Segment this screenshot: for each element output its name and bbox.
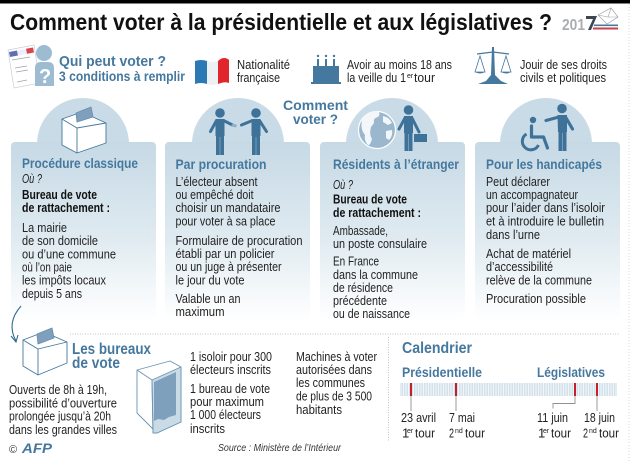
panel: par procuration (165, 98, 310, 320)
source: Source : Ministère de l’Intérieur (218, 443, 342, 454)
text block: Où ? (333, 177, 354, 192)
text: Avoir au moins 18 ans (347, 57, 452, 72)
date: 18 juin: 2 (583, 426, 588, 440)
text block: Procuration possible (486, 291, 586, 306)
icon: scales (475, 47, 511, 84)
condition: age: la veille du 1 (347, 70, 406, 85)
text block (333, 177, 427, 321)
text: isoloir: inscrits (190, 421, 225, 436)
text: horaires: prolongée jusqu’à 20h (9, 408, 111, 424)
section: les bureaux de vote (9, 328, 378, 437)
heading: législatives: Législatives (537, 364, 605, 380)
condition: age: er (407, 73, 414, 80)
section: calendrier (400, 340, 620, 440)
date: 23 avril: 23 avril (401, 410, 436, 425)
text block: choisir un mandataire (176, 200, 280, 215)
condition: age (311, 55, 452, 85)
icon: wheelchair and helper (522, 104, 572, 151)
text block: Bureau de vote (22, 187, 97, 202)
date: 11 juin: 11 juin (537, 410, 568, 425)
text block: de résidence (333, 280, 393, 295)
text: machines: de plus de 3 500 (296, 388, 372, 404)
timeline bar (400, 383, 617, 411)
date: 7 mai: 7 mai (449, 410, 475, 425)
section: qui peut voter (8, 45, 185, 88)
text: Nationalité (237, 57, 290, 72)
date: 11 juin (537, 410, 572, 440)
text block: précédente (333, 293, 387, 308)
text: isoloir: 1 000 électeurs (190, 407, 261, 422)
text block: où l’on paie (22, 260, 72, 274)
text: isoloir: électeurs inscrits (190, 362, 271, 377)
date: 7 mai: 2 (449, 426, 454, 440)
text block: dans la commune (333, 267, 418, 282)
date: 7 mai: tour (465, 426, 486, 440)
text: isoloir: pour maximum (190, 394, 264, 409)
text block: ou d’une commune (22, 246, 116, 262)
panel: pour les handicapés (475, 98, 620, 320)
text block: Achat de matériel (486, 246, 571, 261)
text: isoloir: 1 bureau de vote (190, 381, 270, 396)
title: Comment voter à la présidentielle et aux législatives ? (10, 9, 552, 35)
date: 11 juin: er (543, 428, 550, 435)
text block: La mairie (22, 220, 67, 235)
text block: un accompagnateur (486, 187, 579, 202)
date: 18 juin (583, 410, 620, 440)
text block: et à introduire le bulletin (486, 214, 604, 228)
text: horaires (9, 382, 117, 437)
condition: nationalité (195, 57, 290, 85)
text block: ou de naissance (333, 306, 410, 321)
icon: globe and traveller (358, 105, 427, 151)
text block: Valable un an (176, 291, 240, 306)
text: isoloir: 1 isoloir pour 300 (190, 349, 272, 364)
heading: Par procuration (176, 156, 266, 172)
heading: comment voter (283, 97, 348, 127)
date: 7 mai (449, 410, 486, 440)
text: machines (296, 349, 378, 417)
heading: Pour les handicapés (486, 156, 602, 172)
text block: Formulaire de procuration (176, 233, 302, 248)
text block: ou un juge à présenter (176, 259, 282, 274)
condition: age: tour (414, 70, 436, 85)
arrow (11, 306, 21, 342)
condition: nationalité: française (237, 70, 280, 85)
text block: L’électeur absent (176, 174, 258, 189)
text: horaires: Ouverts de 8h à 19h, (9, 382, 107, 397)
text block: ou empêché doit (176, 187, 254, 202)
icon: person with question mark (35, 45, 54, 88)
text block: relève de la commune (486, 272, 592, 288)
icon: cake (311, 55, 341, 84)
text block: d’accessibilité (486, 259, 553, 274)
text: isoloir (190, 349, 272, 436)
text block (176, 174, 302, 319)
text block: Bureau de vote (333, 192, 407, 206)
text block: pour l’aider dans l’isoloir (486, 200, 606, 215)
text block: En France (333, 254, 379, 268)
date: 7 mai: nd (455, 428, 463, 435)
date: 11 juin: tour (551, 426, 572, 440)
heading: Procédure classique (22, 155, 138, 171)
text: machines: autorisées dans (296, 362, 372, 377)
credit: AFP (9, 440, 53, 456)
credit: AFP: © (9, 444, 17, 456)
logo: 2017 (562, 8, 618, 34)
text block: dans l’urne (486, 227, 540, 242)
heading: comment voter: Comment (283, 97, 348, 113)
text block: le jour du vote (176, 272, 244, 288)
date: 23 avril: 1 (402, 426, 409, 440)
date: 23 avril: er (407, 428, 414, 435)
text block: de rattachement : (22, 200, 110, 215)
text: machines: Machines à voter (296, 349, 378, 364)
section: les bureaux de vote: de vote (72, 355, 120, 372)
date: 11 juin: 1 (538, 426, 545, 440)
condition: droits (475, 47, 607, 85)
icon: person with question mark: ? (39, 66, 51, 88)
heading: Résidents à l’étranger (333, 156, 459, 172)
text block: Peut déclarer (486, 174, 551, 189)
logo: 2017: 201 (562, 17, 585, 34)
date: 18 juin: tour (599, 426, 620, 440)
panel: procédure classique (11, 98, 156, 320)
heading: comment voter: voter ? (293, 111, 338, 127)
heading: Calendrier (402, 340, 472, 357)
text block: de rattachement : (333, 205, 421, 220)
text block (22, 171, 116, 301)
date: 18 juin: 18 juin (584, 410, 615, 425)
condition: droits: civils et politiques (520, 70, 606, 85)
icon: ballot box (62, 107, 106, 153)
text block: les impôts locaux (22, 272, 106, 288)
heading: Les bureaux (72, 341, 151, 358)
date: 23 avril: tour (415, 426, 436, 440)
text block: Où ? (22, 171, 43, 186)
icon: voter card (8, 45, 40, 88)
date: 18 juin: nd (589, 428, 597, 435)
date: 23 avril (401, 410, 436, 440)
text: Jouir de ses droits (520, 57, 607, 72)
subheading: 3 conditions à remplir (59, 68, 185, 84)
icon: flag (195, 58, 229, 85)
icon: two people (210, 108, 266, 155)
text block: depuis 5 ans (22, 286, 82, 301)
text block: établi par un policier (176, 246, 275, 261)
text block: pour voter à sa place (176, 214, 276, 228)
panel: résidents à l'étranger (320, 98, 465, 321)
text block: Ambassade, (333, 223, 388, 238)
credit: AFP: AFP (21, 440, 53, 456)
text block (486, 174, 606, 306)
icon: isoloir (137, 361, 181, 433)
heading: présidentielle: Présidentielle (402, 364, 482, 380)
text: horaires: dans les grandes villes (9, 422, 117, 437)
text: machines: les communes (296, 375, 365, 390)
text: horaires: possibilité d’ouverture (9, 396, 117, 410)
icon: ballot box (23, 328, 67, 375)
text block: un poste consulaire (333, 236, 427, 251)
heading: Qui peut voter ? (59, 53, 166, 70)
text block: de son domicile (22, 233, 98, 248)
text block: maximum (176, 304, 224, 319)
text: machines: habitants (296, 402, 342, 417)
